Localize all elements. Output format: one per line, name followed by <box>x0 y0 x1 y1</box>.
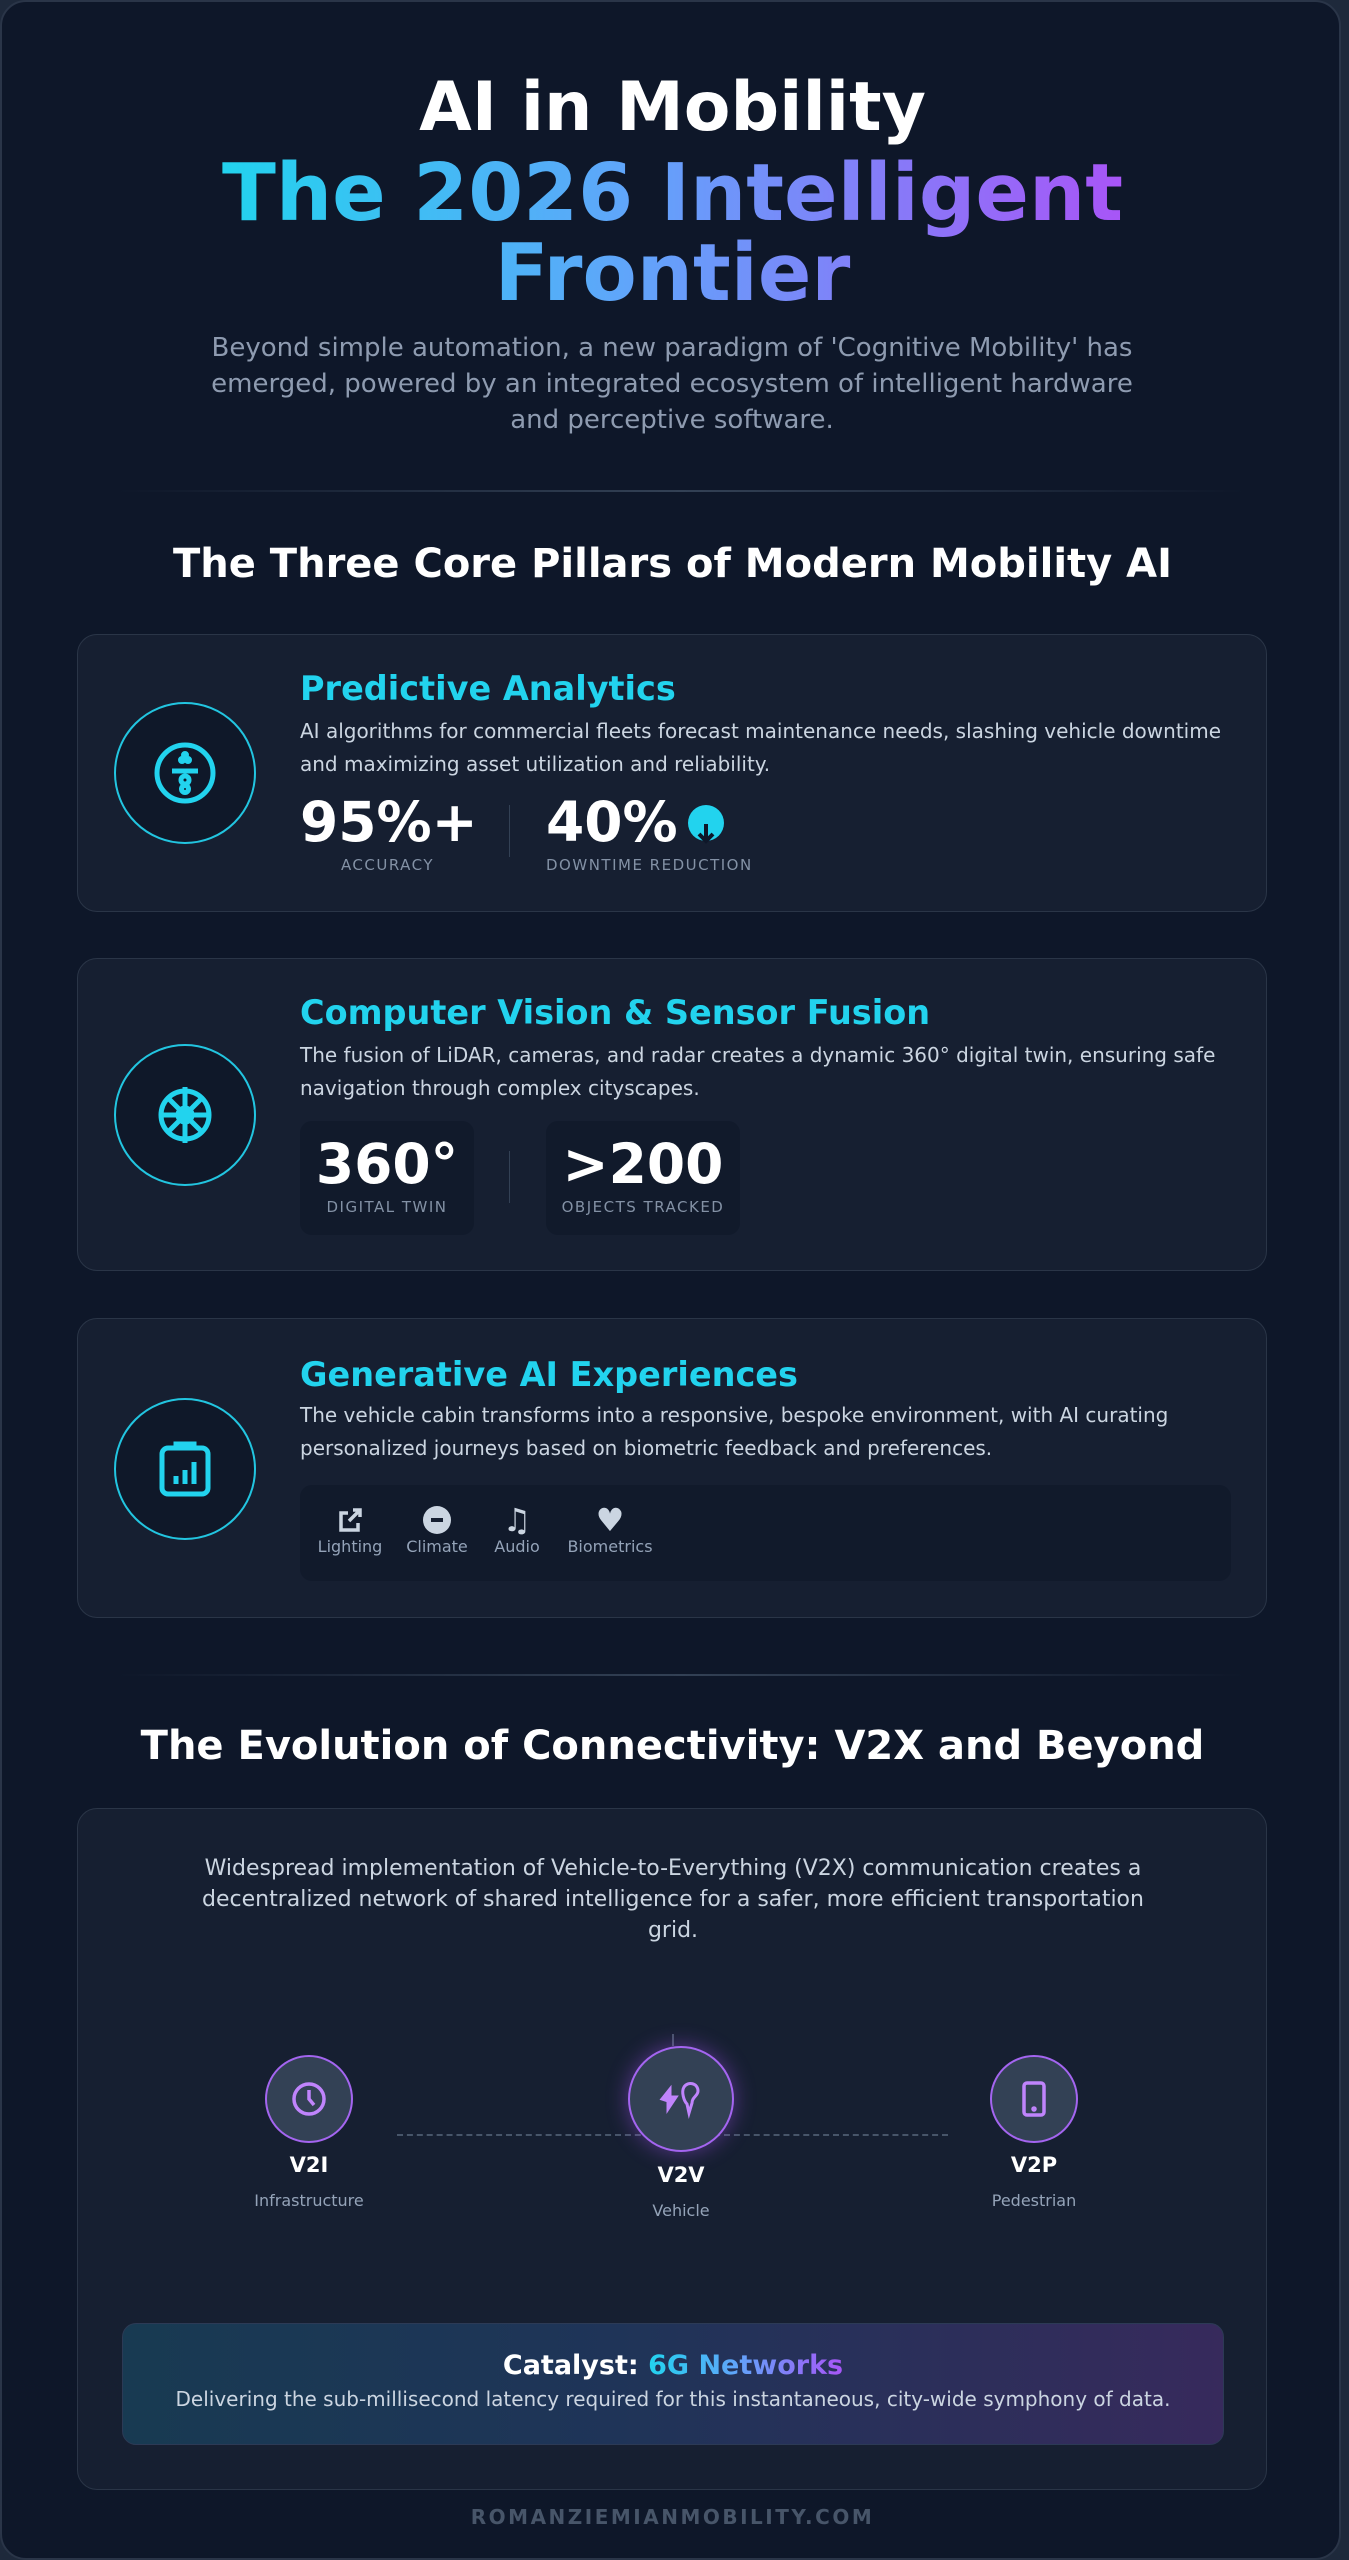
network diagram: Infrastructure <box>254 2191 364 2210</box>
description: AI algorithms for commercial fleets forecast maintenance needs, slashing vehicle downtime and maximizing asset utilization and reliability. <box>300 719 1221 776</box>
heading: Predictive Analytics <box>300 669 676 708</box>
network diagram: Pedestrian <box>992 2191 1076 2210</box>
stat: accuracy: 95%+ <box>300 790 478 854</box>
stat: downtime <box>546 790 753 874</box>
node: V2V <box>628 2046 734 2152</box>
icon: lighting: Lighting <box>318 1537 382 1556</box>
title: AI in Mobility <box>419 68 926 147</box>
description: The vehicle cabin transforms into a responsive, bespoke environment, with AI curating personalized journeys based on biometric feedback and preferences. <box>300 1403 1168 1460</box>
stat: downtime: 40% <box>546 790 678 854</box>
icon: audio <box>494 1501 540 1556</box>
callout: catalyst: Delivering the sub-millisecond latency required for this instantaneous, city-wide symphony of data. <box>176 2387 1170 2411</box>
panel: computer vision <box>77 958 1267 1271</box>
panel: predictive analytics <box>77 634 1267 912</box>
stat box: 360 <box>300 1121 474 1235</box>
description: The fusion of LiDAR, cameras, and radar creates a dynamic 360° digital twin, ensuring safe navigation through complex cityscapes. <box>300 1043 1215 1100</box>
intro text: Beyond simple automation, a new paradigm of 'Cognitive Mobility' has emerged, powered by an integrated ecosystem of intelligent hardware and perceptive software. <box>211 333 1133 435</box>
icon: biometrics: ♥ <box>596 1501 624 1539</box>
callout: catalyst: 6G Networks <box>648 2350 843 2381</box>
node: V2P <box>990 2055 1078 2143</box>
stat box: 200: OBJECTS TRACKED <box>562 1198 724 1216</box>
icon: eye/wheel <box>114 1044 256 1186</box>
icon: climate: Climate <box>406 1537 468 1556</box>
subtitle gradient heading: The 2026 Intelligent <box>222 147 1123 239</box>
node: V2I <box>265 2055 353 2143</box>
network diagram: Vehicle <box>652 2201 710 2220</box>
heading: Computer Vision & Sensor Fusion <box>300 993 930 1032</box>
stat box: 200: >200 <box>563 1132 723 1196</box>
panel: V2X <box>77 1808 1267 2490</box>
subtitle gradient heading: Frontier <box>495 227 850 319</box>
section heading: connectivity: The Evolution of Connectivity: V2X and Beyond <box>141 1723 1204 1769</box>
stat: downtime: DOWNTIME REDUCTION <box>546 856 753 874</box>
label: V2V: V2V <box>657 2163 705 2187</box>
icon: audio: ♫ <box>503 1501 531 1539</box>
subtitle gradient heading <box>222 147 1123 319</box>
icon: biometrics <box>567 1501 653 1556</box>
footer: ROMANZIEMIANMOBILITY.COM <box>471 2505 874 2529</box>
feature strip <box>300 1485 1231 1581</box>
icon: clipboard chart <box>114 1398 256 1540</box>
network diagram <box>254 2034 1078 2220</box>
callout: catalyst: Catalyst: <box>503 2350 639 2381</box>
icon: lighting <box>318 1508 382 1556</box>
icon: climate <box>406 1506 468 1556</box>
icon: audio: Audio <box>494 1537 540 1556</box>
label: V2I: V2I <box>290 2153 328 2177</box>
heading: Generative AI Experiences <box>300 1355 798 1394</box>
description: Widespread implementation of Vehicle-to-Everything (V2X) communication creates a decentralized network of shared intelligence for a safer, more efficient transportation grid. <box>202 1856 1144 1943</box>
stat box: 360: 360° <box>316 1132 458 1196</box>
callout: catalyst <box>122 2323 1224 2445</box>
section heading: pillars: The Three Core Pillars of Modern Mobility AI <box>173 541 1172 587</box>
stat box: 200 <box>546 1121 740 1235</box>
label: V2P: V2P <box>1011 2153 1057 2177</box>
icon: biometrics: Biometrics <box>567 1537 653 1556</box>
stat box: 360: DIGITAL TWIN <box>326 1198 448 1216</box>
stat: accuracy: ACCURACY <box>341 856 434 874</box>
panel: generative AI <box>77 1318 1267 1618</box>
icon: predictive <box>114 702 256 844</box>
